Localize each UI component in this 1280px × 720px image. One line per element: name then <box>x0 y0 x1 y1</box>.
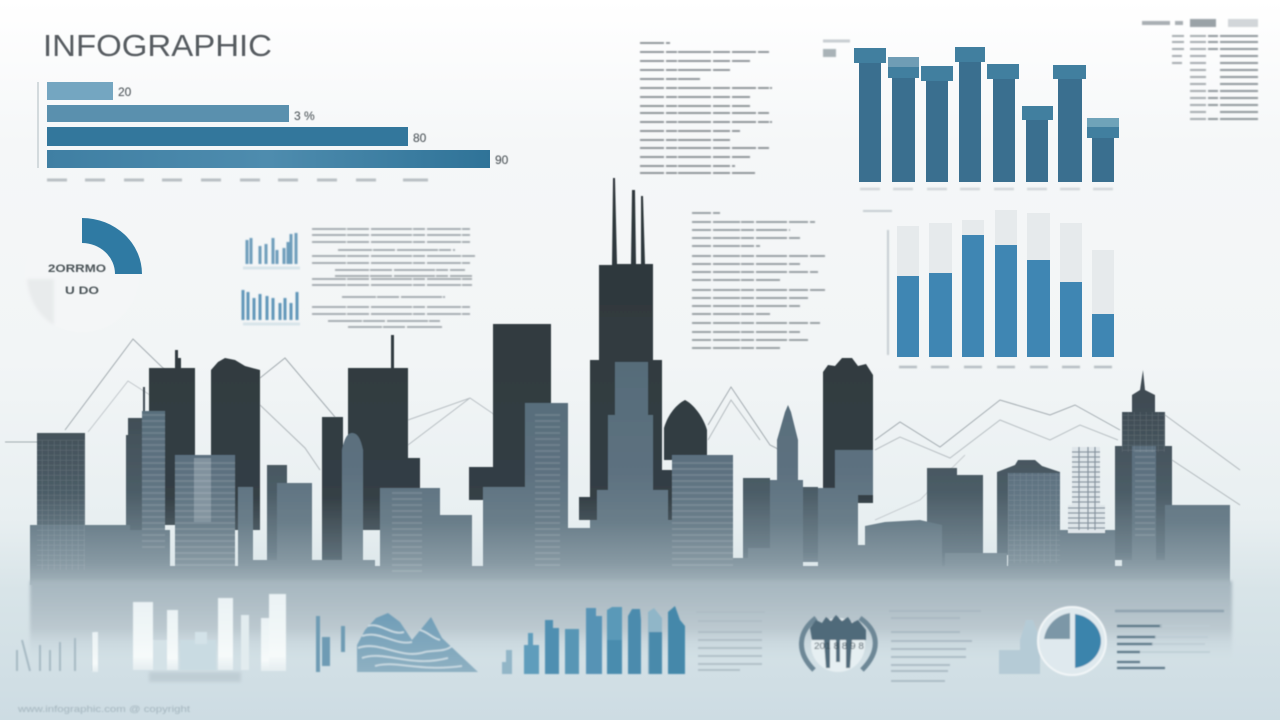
mountains <box>357 613 478 672</box>
stripe texture <box>142 410 1155 575</box>
legend heading <box>1115 610 1224 612</box>
chart legend <box>863 211 892 355</box>
tower stripes <box>1068 447 1105 530</box>
line graphs behind skyline <box>5 339 1240 520</box>
donut labels: 2ORRMO <box>48 263 107 275</box>
donut chart: U DO <box>65 285 100 297</box>
pie ring <box>1038 607 1106 675</box>
bar values: 20 <box>118 85 132 99</box>
mid right stacked column chart <box>863 210 1114 367</box>
footer caption: www.infographic.com @ copyright <box>17 704 191 714</box>
emblem centre <box>811 618 865 672</box>
data table top right <box>1142 19 1258 119</box>
bottom: blue bars <box>502 606 685 674</box>
mountain contour lines <box>358 625 462 668</box>
continuous base strip <box>30 566 1230 585</box>
white towers <box>92 594 286 672</box>
column caps <box>854 47 1119 138</box>
pie blue slice <box>1075 614 1101 668</box>
column values <box>897 235 1114 357</box>
pale glass tower <box>1068 447 1105 533</box>
fog band under skyline <box>30 581 1232 661</box>
bottom: pie chart with buildings <box>999 607 1106 675</box>
bar 4 <box>47 150 490 168</box>
legend rows <box>1117 626 1165 668</box>
text block: centre left <box>312 229 475 327</box>
bottom: legend text <box>1115 611 1224 668</box>
bottom: circular people emblem <box>801 615 875 672</box>
small buildings <box>999 620 1040 674</box>
window texture <box>37 412 1165 570</box>
bar 2 <box>47 105 289 122</box>
emblem arcs <box>801 618 875 670</box>
legend row values <box>1140 626 1210 652</box>
bar 1 <box>47 82 113 100</box>
horizontal bar chart <box>37 82 509 180</box>
city skyline <box>30 178 1230 585</box>
slate foreground buildings <box>30 362 1230 585</box>
pale lit panel <box>194 458 211 522</box>
bar values <box>118 85 509 167</box>
pale small towers <box>153 640 167 670</box>
small bars <box>316 616 345 672</box>
soft shadow <box>149 672 241 682</box>
bar 3 <box>47 127 408 146</box>
legend <box>823 49 836 57</box>
donut blue segment <box>82 218 142 274</box>
bar values: 80 <box>413 131 427 145</box>
top right column chart <box>823 41 1119 189</box>
axis labels <box>47 178 428 182</box>
bottom: white buildings <box>92 594 286 682</box>
emblem label: 201 8 8 9 8 <box>814 641 864 651</box>
mini bar charts <box>243 233 300 324</box>
donut grey wedge <box>27 279 54 325</box>
dark towers <box>149 178 873 562</box>
bottom: text block 2 <box>889 611 981 681</box>
bar values: 3 % <box>294 109 315 123</box>
bottom: blue mountain chart <box>316 613 478 672</box>
pie grey slice <box>1044 613 1070 639</box>
text block: centre right <box>692 213 825 348</box>
axis labels <box>899 366 1112 368</box>
title: INFOGRAPHIC <box>43 28 272 63</box>
emblem figures <box>810 615 866 668</box>
columns <box>859 60 1114 182</box>
mid-tone buildings <box>37 370 1172 568</box>
bottom: text block 1 <box>696 612 765 670</box>
text block: top centre <box>640 43 772 173</box>
donut chart <box>25 218 142 332</box>
bottom: wind turbines sketch <box>17 632 93 671</box>
cap highlights <box>888 57 919 67</box>
column backgrounds <box>897 210 1114 315</box>
axis labels <box>860 188 1113 190</box>
bar values: 90 <box>495 153 509 167</box>
